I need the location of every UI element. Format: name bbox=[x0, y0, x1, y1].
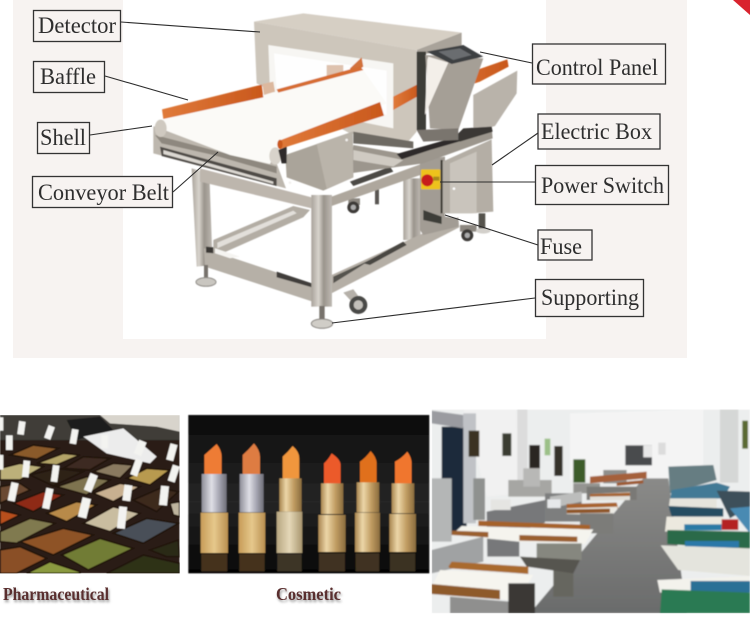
label: Supporting: Supporting bbox=[541, 285, 639, 310]
electric box bbox=[420, 139, 493, 235]
label: Shell: Shell bbox=[40, 125, 86, 150]
lipstick 3 bbox=[277, 446, 302, 571]
background panel bbox=[13, 0, 687, 358]
feet and front casters bbox=[196, 265, 367, 328]
control panel bbox=[417, 45, 483, 142]
label: Supporting bbox=[536, 280, 644, 316]
power switch bbox=[421, 169, 440, 189]
front side plate bbox=[278, 132, 353, 191]
photo: lipsticks bbox=[188, 415, 429, 573]
photo: spices bbox=[0, 415, 180, 573]
leader lines bbox=[90, 22, 538, 323]
red corner mark bbox=[733, 0, 750, 15]
label: Control Panel bbox=[532, 44, 666, 84]
frame rails and legs bbox=[192, 163, 459, 307]
outfeed plate bbox=[453, 71, 517, 142]
rear baffle segments bbox=[393, 59, 509, 110]
label: Detector: Detector bbox=[38, 13, 116, 38]
label: Power Switch bbox=[536, 166, 668, 204]
left baffle bbox=[162, 67, 363, 119]
green and blue machines bbox=[657, 465, 750, 613]
label: Conveyor Belt: Conveyor Belt bbox=[38, 180, 170, 205]
walk-through gate bbox=[432, 411, 485, 542]
foreground conveyor bbox=[432, 537, 535, 613]
photo: factory floor bbox=[432, 409, 750, 613]
lipstick 1 bbox=[201, 444, 228, 571]
table under conveyor bbox=[350, 127, 493, 173]
caption: Cosmetic: Cosmetic bbox=[276, 584, 341, 604]
conveyor belt surface bbox=[155, 70, 387, 165]
detector head bbox=[254, 13, 463, 148]
wall posters and doors bbox=[469, 421, 748, 483]
white photo backdrop bbox=[123, 0, 546, 339]
label: Power Switch: Power Switch bbox=[541, 173, 664, 198]
lipstick 6 bbox=[389, 452, 416, 571]
caption: Pharmaceutical: Pharmaceutical bbox=[3, 584, 109, 604]
right baffle bbox=[277, 102, 384, 149]
lipstick 2 bbox=[239, 443, 265, 571]
near conveyor bbox=[452, 499, 593, 597]
rear wheels bbox=[347, 188, 491, 241]
lipstick 4 bbox=[318, 453, 346, 571]
far detectors row bbox=[508, 468, 647, 501]
left conveyor frame bbox=[153, 126, 286, 188]
machine illustration bbox=[153, 13, 517, 328]
label: Electric Box bbox=[538, 114, 660, 149]
lipstick 5 bbox=[355, 451, 380, 571]
label: Fuse bbox=[538, 230, 592, 260]
label: Baffle bbox=[34, 62, 104, 92]
label: Electric Box: Electric Box bbox=[541, 119, 652, 144]
mid conveyor bbox=[545, 492, 618, 533]
label: Baffle: Baffle bbox=[40, 64, 96, 89]
label: Control Panel: Control Panel bbox=[536, 55, 658, 80]
label: Fuse: Fuse bbox=[540, 234, 582, 259]
